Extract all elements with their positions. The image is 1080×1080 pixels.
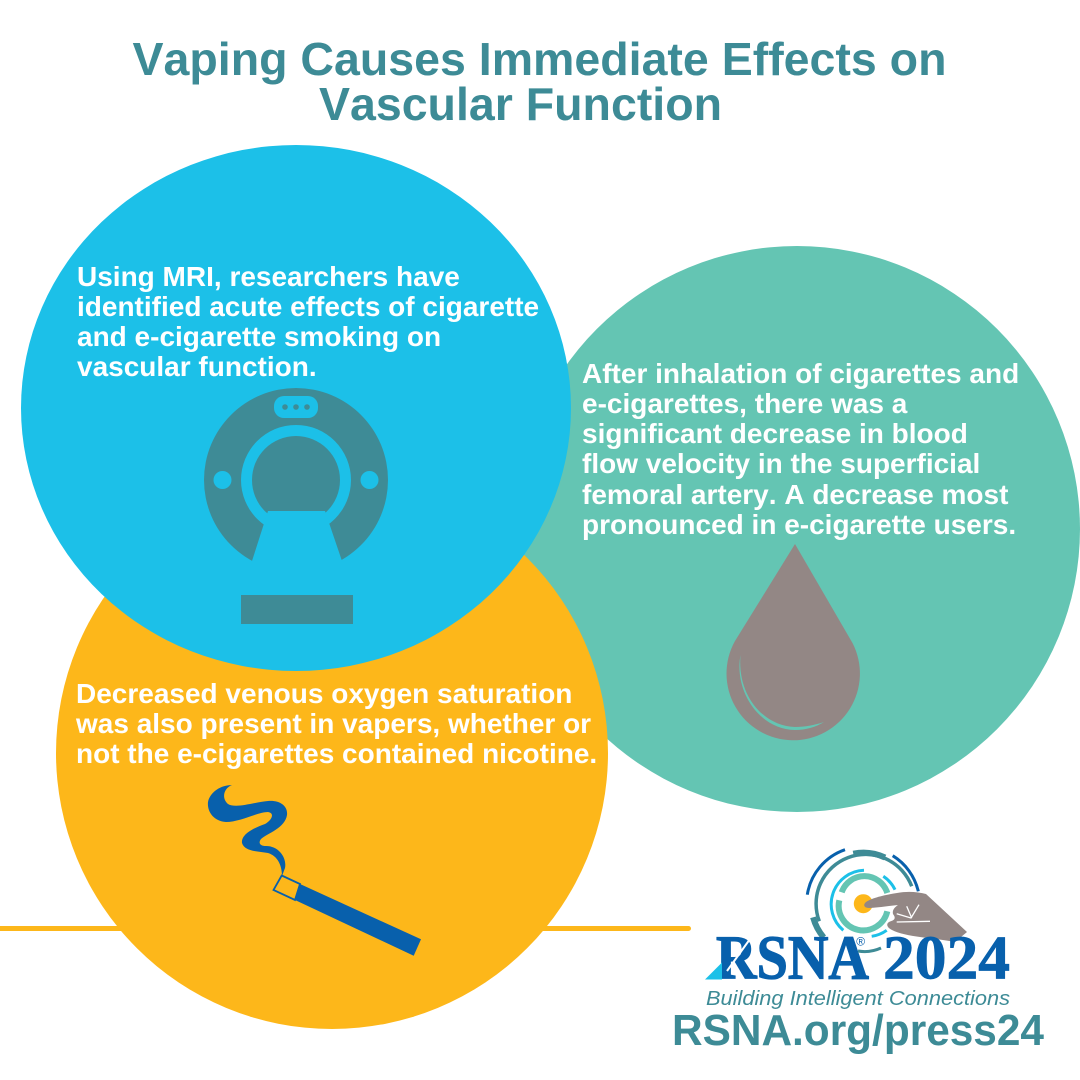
text: MRI introduction: vascular function.	[77, 351, 317, 382]
text: oxygen saturation findings: not the e-cigarettes contained nicotine.	[76, 738, 597, 769]
text: blood flow findings: significant decrease in blood	[582, 418, 968, 449]
logo rings	[807, 850, 918, 937]
title	[133, 33, 946, 130]
logo wordmark: ®	[856, 934, 865, 948]
text: blood flow findings: flow velocity in the superficial	[582, 448, 980, 479]
panel: venous oxygen saturation	[56, 477, 608, 1029]
logo hand	[864, 892, 967, 942]
website URL: RSNA.org/press24	[672, 1006, 1045, 1055]
text: oxygen saturation findings	[75, 678, 597, 769]
yellow divider line	[0, 926, 691, 931]
text: MRI introduction	[77, 261, 539, 382]
logo wordmark: 2024	[883, 922, 1010, 992]
panel: blood flow velocity	[514, 246, 1080, 812]
text: blood flow findings: After inhalation of cigarettes and	[582, 358, 1019, 389]
text: MRI introduction: and e-cigarette smoking on	[77, 321, 441, 352]
text: blood flow findings: pronounced in e-cigarette users.	[582, 509, 1016, 540]
logo wordmark: RSNA	[716, 922, 869, 992]
text: MRI introduction: Using MRI, researchers have	[77, 261, 460, 292]
panel: MRI effects	[21, 145, 571, 671]
logo tagline: Building Intelligent Connections	[706, 988, 1010, 1010]
title: Vascular Function	[319, 78, 722, 130]
text: oxygen saturation findings: was also present in vapers, whether or	[75, 708, 591, 739]
icon: cigarette with smoke	[208, 785, 421, 956]
logo hand details	[897, 905, 930, 922]
logo wordmark	[705, 922, 1010, 992]
text: MRI introduction: identified acute effects of cigarette	[77, 291, 539, 322]
logo: RSNA 2024	[705, 850, 1010, 1010]
icon: MRI scanner	[204, 388, 388, 624]
text: blood flow findings: e-cigarettes, there was a	[582, 388, 908, 419]
icon: blood drop	[727, 544, 860, 740]
text: blood flow findings	[582, 358, 1019, 540]
text: oxygen saturation findings: Decreased venous oxygen saturation	[76, 678, 572, 709]
title: Vaping Causes Immediate Effects on	[133, 33, 946, 85]
text: blood flow findings: femoral artery. A decrease most	[582, 479, 1008, 510]
logo target dot	[854, 894, 873, 913]
